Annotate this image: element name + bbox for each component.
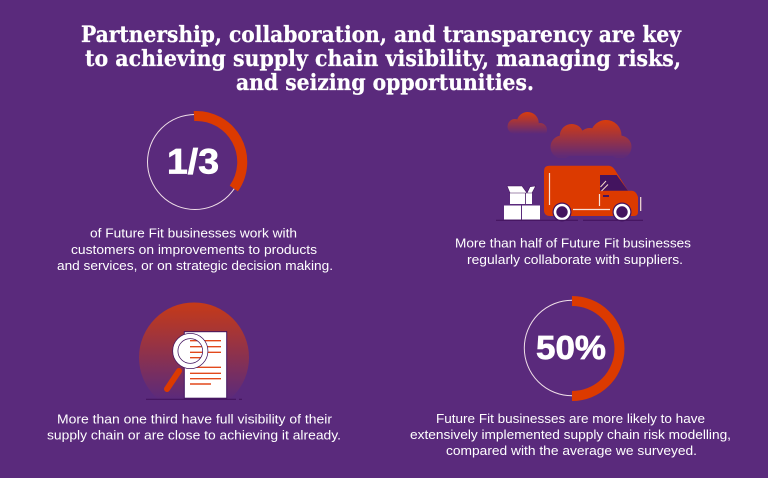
text: risk modelling stat: Future Fit businesses are more likely to have [436,411,705,426]
text: customers stat: customers on improvements to products [71,242,318,257]
text: visibility stat [47,411,341,443]
icon: small cloud [508,112,547,132]
text: risk modelling stat: compared with the average we surveyed. [446,443,697,458]
icon: van [544,166,641,222]
text: visibility stat: supply chain or are close to achieving it already. [47,428,341,443]
chart: one third ring: 1/3 [167,142,219,182]
title: Partnership, collaboration, and transparency are key [81,22,682,48]
title [81,22,682,96]
icon: gradient circle [139,302,249,412]
text: customers stat: and services, or on strategic decision making. [57,258,333,273]
icon: large cloud [550,120,632,156]
text: suppliers stat [455,236,692,267]
title: to achieving supply chain visibility, managing risks, [85,46,681,72]
title: and seizing opportunities. [236,70,534,96]
text: risk modelling stat: extensively implemented supply chain risk modelling, [410,427,731,442]
chart: fifty percent ring: 50% [536,329,606,366]
icon: delivery van with clouds and boxes [496,110,643,222]
text: suppliers stat: regularly collaborate with suppliers. [467,252,683,267]
icon: magnifier [167,336,205,389]
text: customers stat: of Future Fit businesses work with [90,226,297,240]
icon: magnifying glass over document [139,302,249,412]
text: suppliers stat: More than half of Future Fit businesses [455,236,692,250]
icon: boxes [504,186,540,220]
icon: document [177,332,227,398]
chart: fifty percent ring [524,300,620,396]
text: customers stat [57,226,333,273]
text: risk modelling stat [410,411,731,458]
text: visibility stat: More than one third have full visibility of their [57,411,333,426]
chart: one third ring [148,114,242,210]
